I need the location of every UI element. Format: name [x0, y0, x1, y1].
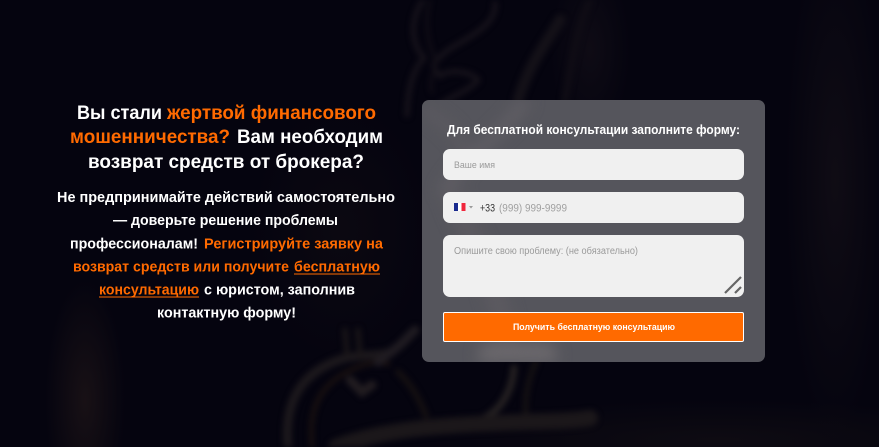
- text block: call to action: [57, 190, 395, 322]
- input: phone: [443, 192, 744, 223]
- heading: жертвой финансового: [166, 102, 376, 124]
- text block: call to action: возврат средств или получите: [73, 260, 289, 276]
- heading: [70, 102, 383, 173]
- panel: contact form background: [422, 100, 765, 362]
- input: name: [443, 149, 744, 180]
- icon: French flag: [454, 203, 466, 211]
- submit button: Получить бесплатную консультацию: [513, 322, 675, 332]
- text block: call to action: — доверьте решение проблемы: [113, 213, 338, 229]
- text block: call to action: с юристом, заполнив: [204, 282, 355, 298]
- heading: Вам необходим: [237, 126, 383, 148]
- text block: call to action: консультацию: [99, 282, 199, 298]
- text block: call to action: контактную форму!: [157, 306, 296, 322]
- heading: возврат средств от брокера?: [88, 151, 364, 173]
- text block: call to action: бесплатную: [294, 260, 380, 276]
- heading: мошенничества?: [70, 126, 230, 148]
- input: phone: +33: [480, 202, 495, 214]
- link underline: [294, 274, 380, 275]
- input: name: Ваше имя: [454, 160, 495, 170]
- icon: textarea resize handle: [725, 277, 741, 293]
- input: phone: (999) 999-9999: [499, 202, 567, 214]
- text block: call to action: профессионалам!: [70, 236, 198, 252]
- input: problem description: [443, 235, 744, 297]
- form heading: Для бесплатной консультации заполните форму:: [447, 123, 740, 137]
- heading: Вы стали: [77, 102, 162, 124]
- input: problem description: Опишите свою проблему: (не обязательно): [454, 245, 638, 257]
- icon: dropdown arrow: [469, 206, 473, 208]
- text block: call to action: Не предпринимайте действий самостоятельно: [57, 190, 395, 206]
- text block: call to action: Регистрируйте заявку на: [204, 236, 384, 252]
- submit button: [444, 312, 744, 342]
